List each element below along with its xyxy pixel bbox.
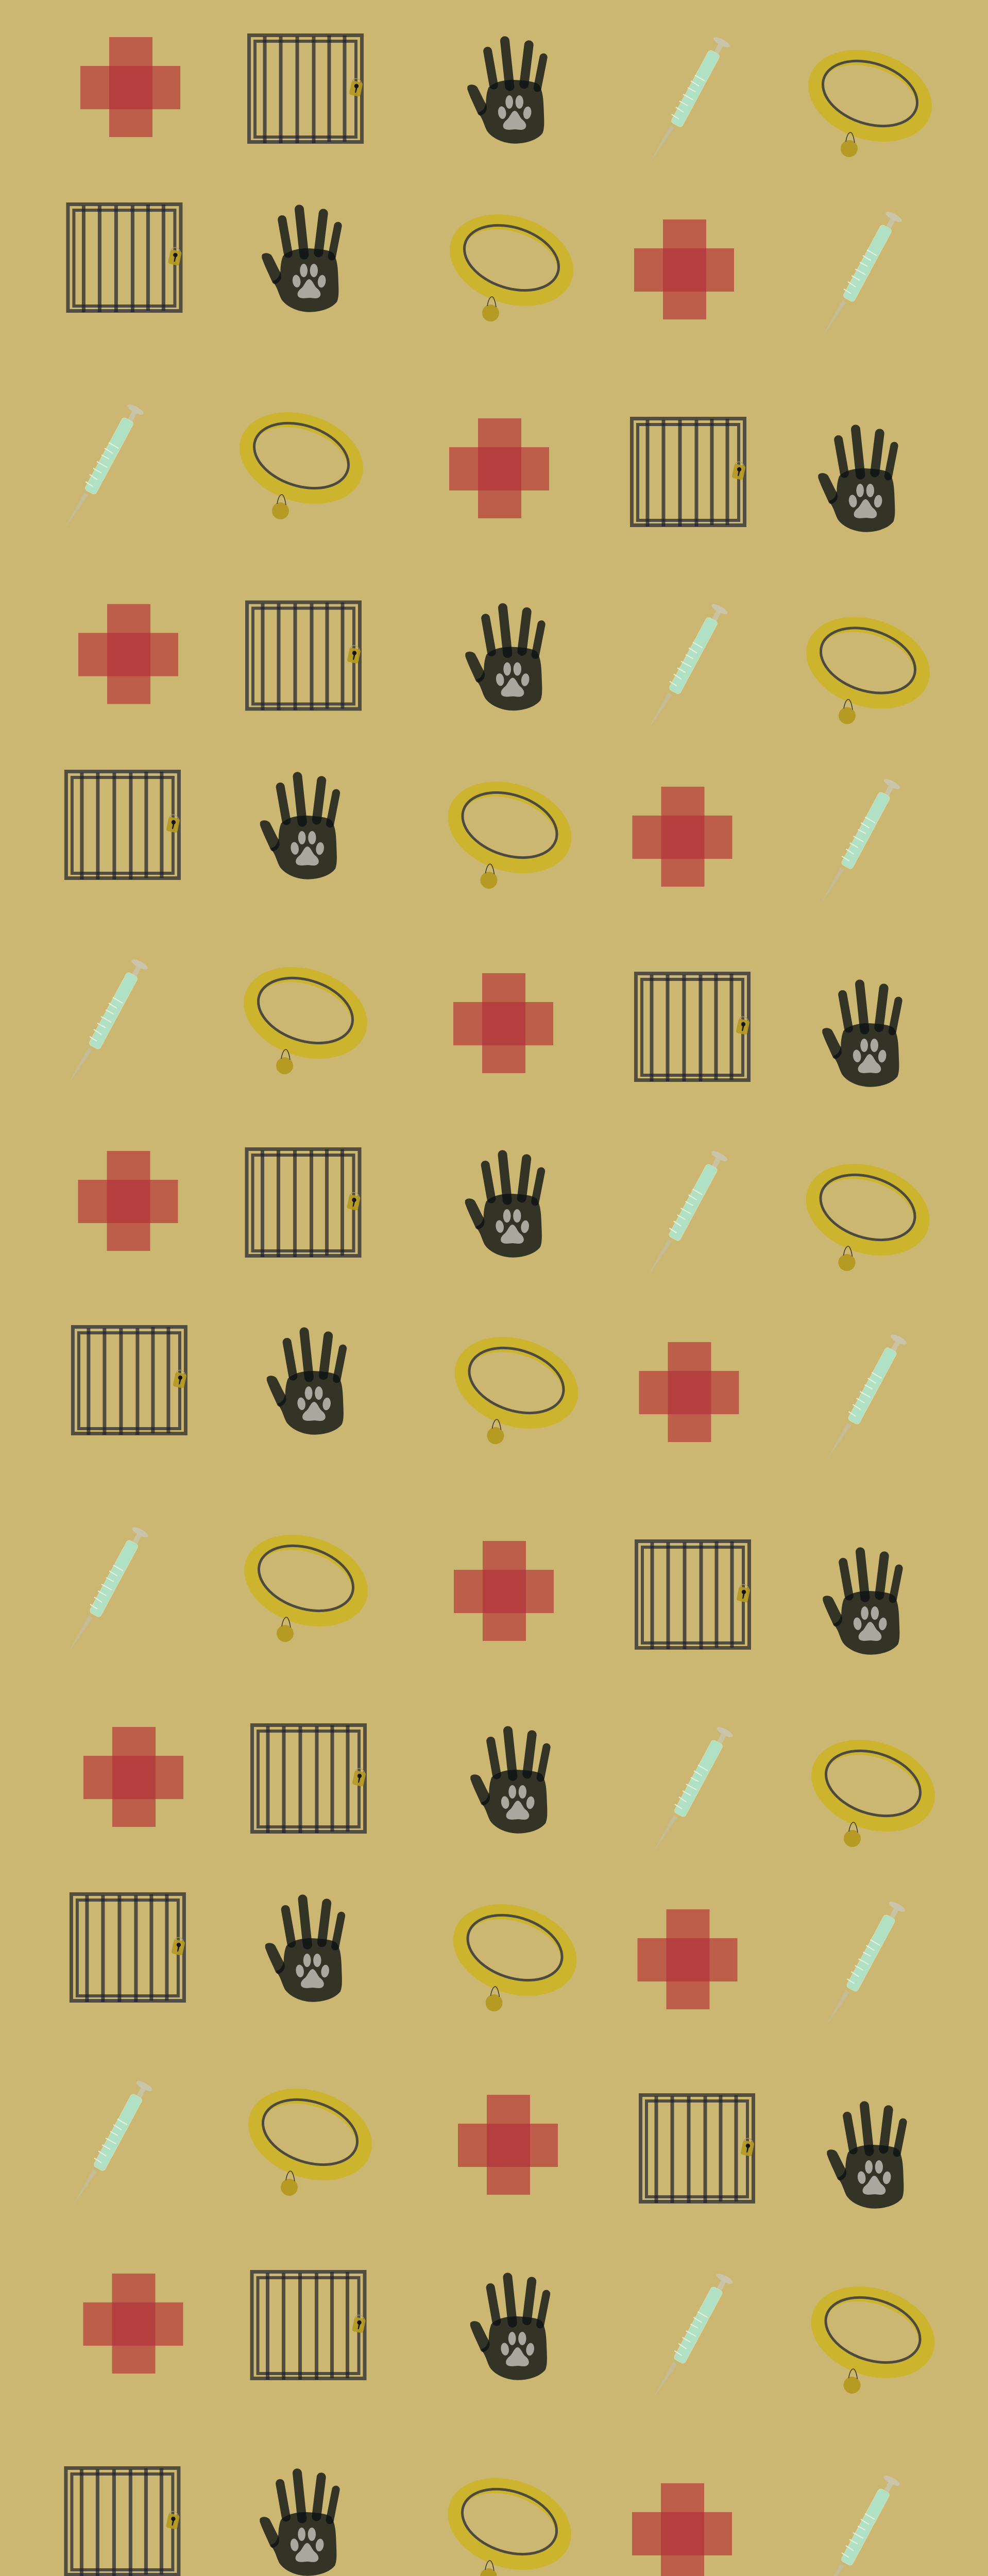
icon: cage <box>637 1541 751 1649</box>
row 3 <box>64 397 895 532</box>
icon: hand with paw <box>470 1731 547 1834</box>
icon: medical cross <box>634 219 734 319</box>
row 14 <box>66 2463 901 2576</box>
icon: cage <box>247 602 361 710</box>
icon: syringe <box>650 35 731 162</box>
icon: hand with paw <box>265 1899 342 2002</box>
icon: hand with paw <box>827 2106 904 2209</box>
icon: syringe <box>648 1149 729 1276</box>
icon: medical cross <box>78 1151 178 1251</box>
row 5 <box>66 767 901 904</box>
row 2 <box>68 199 903 337</box>
icon: medical cross <box>80 37 180 137</box>
icon: hand with paw <box>823 1552 899 1655</box>
icon: hand with paw <box>470 2277 547 2380</box>
icon: medical cross <box>449 418 549 518</box>
icon: collar <box>796 35 944 157</box>
icon: medical cross <box>639 1342 739 1442</box>
icon: cage <box>252 1725 366 1833</box>
icon: hand with paw <box>262 209 338 312</box>
row 7 <box>78 1149 942 1276</box>
icon: hand with paw <box>260 2473 336 2576</box>
icon: syringe <box>822 210 903 337</box>
icon: medical cross <box>83 2274 183 2374</box>
icon: collar <box>799 2272 947 2394</box>
icon: medical cross <box>632 2483 732 2576</box>
icon: collar <box>794 1149 942 1271</box>
icon: collar <box>436 2463 583 2576</box>
icon: hand with paw <box>465 1155 542 1258</box>
icon: syringe <box>73 2079 154 2206</box>
icon: syringe <box>653 2272 734 2399</box>
icon: collar <box>438 199 585 321</box>
icon: collar <box>228 397 375 519</box>
icon: hand with paw <box>818 429 895 532</box>
icon: cage <box>632 418 746 527</box>
row 1 <box>80 35 944 162</box>
icon: cage <box>249 35 363 143</box>
icon: cage <box>66 772 180 879</box>
row 9 <box>69 1520 899 1655</box>
icon: cage <box>68 204 182 312</box>
icon: medical cross <box>453 973 553 1073</box>
icon: cage <box>71 1894 185 2002</box>
icon: hand with paw <box>467 41 544 144</box>
row 12 <box>73 2074 904 2209</box>
icon: collar <box>442 1322 590 1444</box>
icon: medical cross <box>458 2095 558 2195</box>
icon: syringe <box>820 777 901 904</box>
icon: collar <box>441 1889 589 2011</box>
icon: syringe <box>64 402 145 530</box>
icon: medical cross <box>454 1541 554 1641</box>
icon: syringe <box>69 1525 149 1652</box>
row 8 <box>73 1322 908 1460</box>
row 11 <box>71 1889 907 2027</box>
icon: syringe <box>825 1900 907 2027</box>
icon: medical cross <box>83 1727 183 1827</box>
icon: collar <box>794 602 942 724</box>
icon: syringe <box>653 1725 734 1852</box>
icon: collar <box>436 767 584 889</box>
icon: medical cross <box>78 604 178 704</box>
row 4 <box>78 602 942 730</box>
icon: cage <box>252 2272 366 2380</box>
row 6 <box>68 952 899 1087</box>
icon: medical cross <box>638 1909 738 2009</box>
row 10 <box>83 1725 947 1852</box>
icon: medical cross <box>633 787 733 887</box>
icon: collar <box>236 2074 384 2196</box>
icon: cage <box>66 2468 180 2576</box>
icon: syringe <box>68 957 149 1084</box>
icon: hand with paw <box>822 984 899 1087</box>
icon: cage <box>641 2095 755 2203</box>
icon: syringe <box>827 1332 908 1460</box>
icon: syringe <box>648 602 729 730</box>
icon: hand with paw <box>260 776 337 879</box>
icon: collar <box>799 1725 947 1847</box>
row 13 <box>83 2272 947 2399</box>
icon: hand with paw <box>267 1332 344 1435</box>
icon: syringe <box>820 2473 901 2576</box>
icon: cage <box>636 974 750 1081</box>
icon: hand with paw <box>465 608 542 710</box>
icon: cage <box>247 1149 361 1257</box>
icon: cage <box>73 1327 187 1435</box>
icon: collar <box>232 1520 380 1642</box>
icon: collar <box>232 952 379 1074</box>
